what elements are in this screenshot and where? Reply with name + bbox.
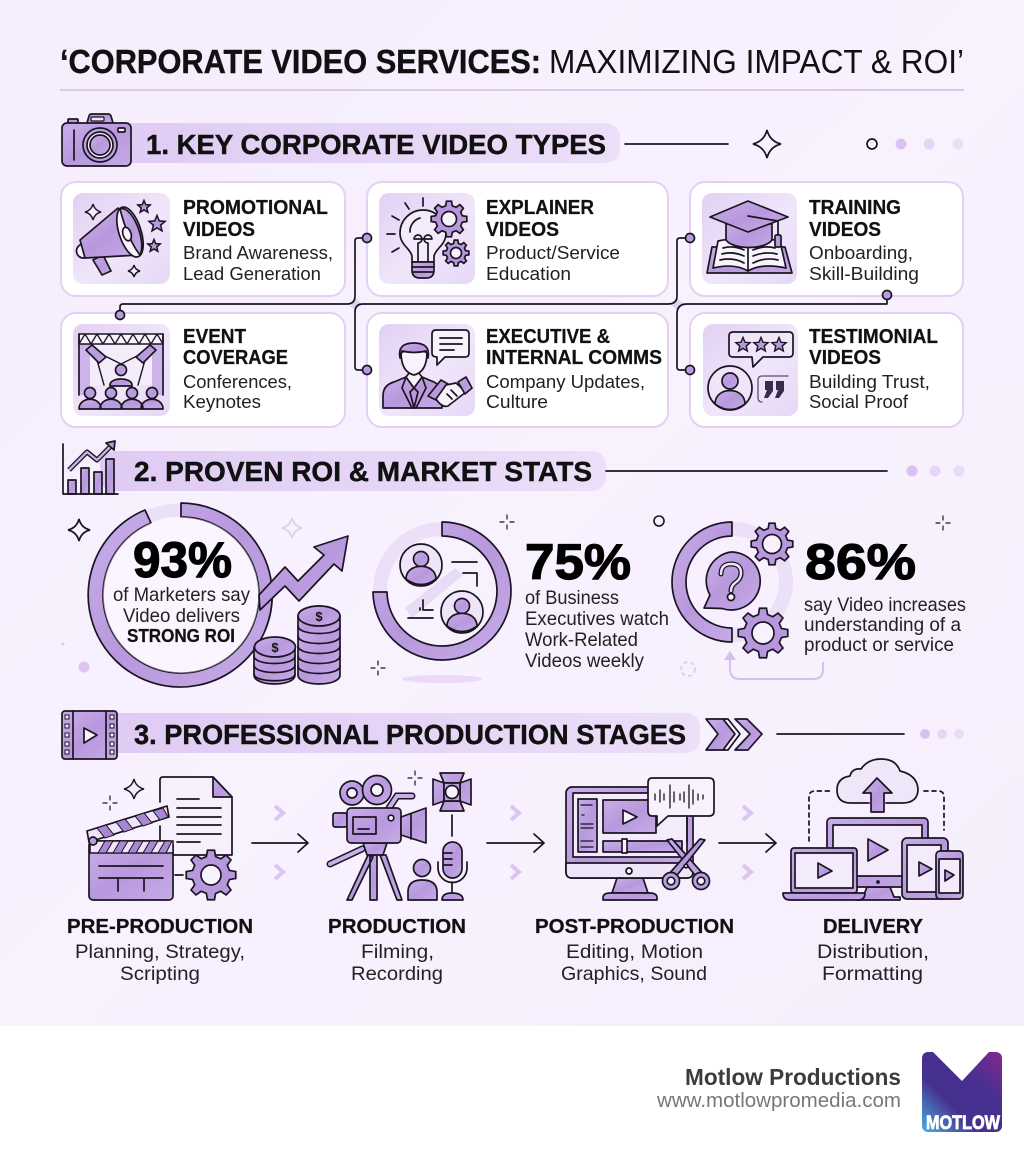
stage: production: Filming, [361,941,434,963]
card: event coverage: Conferences, [183,371,292,392]
card: testimonial videos: VIDEOS [809,347,881,369]
icon: chevrons [706,719,762,750]
icon: question bubble [704,552,760,610]
stat text 75% [525,534,669,672]
logo [922,1052,1002,1134]
arrow: post-production to delivery [719,806,776,879]
section 3 heading [62,711,964,759]
icon: coin stacks: $ [271,640,279,655]
section 2 heading: 2. PROVEN ROI & MARKET STATS [134,456,592,487]
card: event coverage: EVENT [183,326,246,348]
title: MAXIMIZING IMPACT & ROI’ [549,43,964,80]
donut ring 93% [88,503,272,687]
icon: camera [62,114,131,166]
title: ‘CORPORATE VIDEO SERVICES: [60,43,541,80]
card: explainer videos: Product/Service [486,242,620,263]
arrow: pre-production to production [252,806,308,879]
logo: MOTLOW [926,1113,1000,1134]
stage: production: PRODUCTION [328,915,466,938]
icon: gears [738,523,793,658]
card: event coverage [61,313,345,427]
footer website: www.motlowpromedia.com [656,1090,901,1112]
stage: production: Recording [351,963,443,985]
section 3 heading: 3. PROFESSIONAL PRODUCTION STAGES [134,719,686,750]
icon: coin stacks: $ [315,609,323,624]
icon: studio light, microphone, presenter [408,771,471,900]
stage: pre-production: Scripting [120,963,200,985]
card: promotional videos: VIDEOS [183,219,255,241]
stage: pre-production [67,777,253,985]
section 2 heading [63,441,964,494]
stage: post-production: POST-PRODUCTION [535,915,734,938]
stat: 93% strong ROI [88,503,348,687]
card: testimonial videos: Social Proof [809,391,909,412]
icon: coin stacks [254,606,340,684]
stage: post-production: Editing, Motion [566,941,703,963]
card: training videos: Skill-Building [809,263,919,284]
icon: cloud upload and devices [783,759,963,900]
card: promotional videos [61,182,345,296]
stat text 86% [804,534,966,656]
card: executive and internal comms: Company Updates, [486,371,645,392]
icon: editing monitor and scissors [566,778,714,900]
card: event coverage: COVERAGE [183,347,288,369]
card: executive and internal comms: INTERNAL COMMS [486,347,662,369]
card: promotional videos: Lead Generation [183,263,321,284]
card: explainer videos: EXPLAINER [486,197,595,219]
stat text 93%: of Marketers say [113,584,250,606]
footer brand name: Motlow Productions [685,1064,901,1090]
stage: post-production: Graphics, Sound [561,963,707,985]
card: explainer videos [367,182,668,296]
stat text 75%: Work-Related [525,629,638,651]
card: explainer videos: VIDEOS [486,219,559,241]
icon: film strip [62,711,117,759]
stage: pre-production: Planning, Strategy, [75,941,245,963]
icon: graduation cap on book [707,201,792,273]
icon: clapperboard, script and gear [87,777,236,900]
feedback arrow head [724,651,736,660]
card: promotional videos: PROMOTIONAL [183,197,328,219]
icon: light bulb and gears [387,198,469,278]
card: training videos [690,182,963,296]
stage: delivery: DELIVERY [823,915,923,938]
donut ring 86% [672,522,793,642]
stat text 86%: say Video increases [804,594,966,616]
card: explainer videos: Education [486,263,571,284]
arrow: production to post-production [487,806,544,879]
stat text 93%: STRONG ROI [127,625,235,646]
card: event coverage: Keynotes [183,391,261,412]
stat text 75%: Videos weekly [525,650,644,672]
icon: stage with audience [79,334,163,409]
icon: rising arrow [259,536,348,610]
section 1 heading [62,114,964,166]
card: training videos: TRAINING [809,197,901,219]
stage: delivery [783,759,963,985]
card: training videos: Onboarding, [809,242,913,263]
stage: production [328,771,471,985]
donut ring 75% [373,522,511,660]
stat text 86%: understanding of a [804,614,961,636]
stat text 93%: Video delivers [123,605,240,627]
stat text 75%: 75% [525,534,631,590]
card: executive and internal comms [367,313,668,427]
decorative sparkles [62,515,950,683]
stat text 86%: product or service [804,634,954,656]
stat: 75% executives [373,522,669,672]
card: executive and internal comms: EXECUTIVE & [486,326,610,348]
stat text 75%: of Business [525,587,619,609]
icon: two people exchanging [400,544,483,633]
card: training videos: VIDEOS [809,219,881,241]
connector lines [116,234,892,374]
stat text 75%: Executives watch [525,608,669,630]
card: testimonial videos: Building Trust, [809,371,930,392]
stage: pre-production: PRE-PRODUCTION [67,915,253,938]
icon: review bubble and customer [708,332,793,410]
icon: rising bar chart [63,441,118,494]
icon: film camera on tripod [330,776,426,900]
card: testimonial videos [690,313,963,427]
section 1 heading: 1. KEY CORPORATE VIDEO TYPES [146,129,606,160]
stat: 86% understanding [672,522,966,679]
card: promotional videos: Brand Awareness, [183,242,333,263]
card: testimonial videos: TESTIMONIAL [809,326,938,348]
icon: executive with handshake [383,330,472,408]
stat text 86%: 86% [805,534,916,590]
curved feedback arrow [730,655,823,679]
stage: post-production [535,778,734,985]
icon: megaphone [76,200,165,277]
stat text 93% [113,532,250,646]
stage: delivery: Formatting [822,963,923,985]
stage: delivery: Distribution, [817,941,929,963]
stat text 93%: 93% [133,532,232,588]
card: executive and internal comms: Culture [486,391,548,412]
